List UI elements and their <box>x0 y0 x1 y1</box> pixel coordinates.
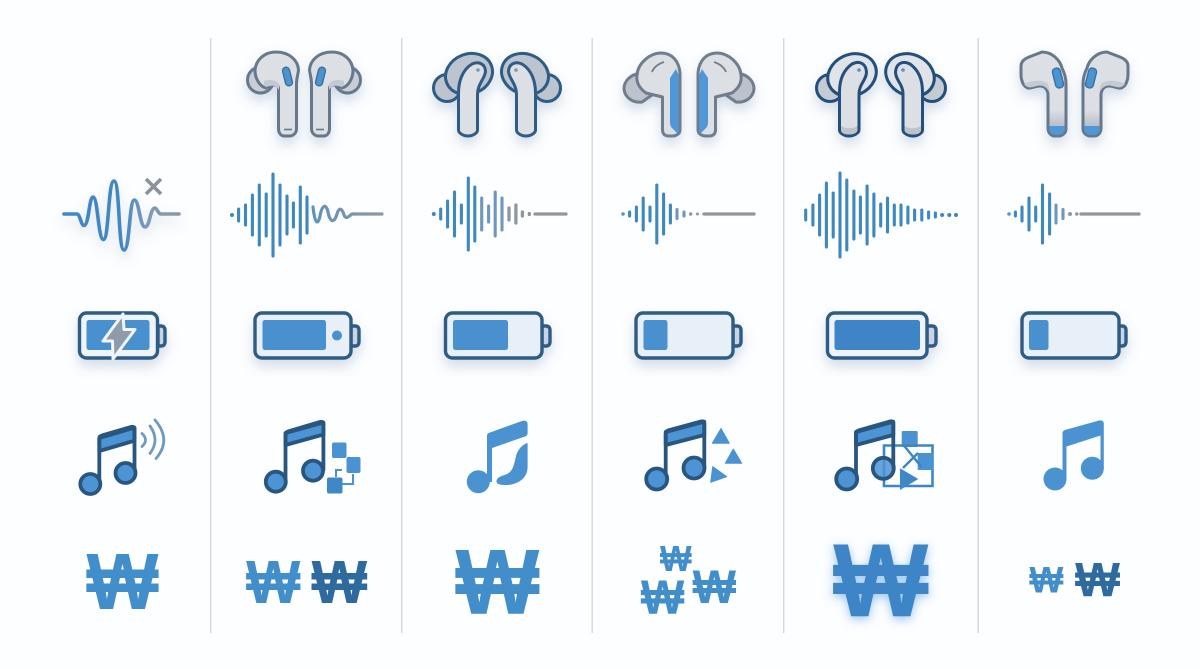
icon: waveform 5 <box>1007 185 1139 243</box>
icon: waveform 3 <box>621 185 754 243</box>
icon: battery charging <box>80 313 165 359</box>
icon: large won sign: ₩ <box>455 531 539 634</box>
icon: earbuds model 2 <box>434 46 560 136</box>
icon: battery with dot <box>255 313 359 358</box>
icon: largest won sign with glow: ₩ <box>833 522 929 638</box>
icon: three won signs <box>641 540 736 624</box>
icon: battery 20 percent <box>1022 313 1126 358</box>
icon: solid music note <box>1044 420 1104 490</box>
icon: battery 25 percent <box>636 313 741 358</box>
icon: two won signs: ₩ <box>311 548 367 616</box>
row: sound waves <box>64 173 1139 257</box>
icon: music note with wireless arcs <box>80 420 164 494</box>
icon: music note with mixed shapes <box>836 421 933 490</box>
icon: earbuds model 4 <box>816 46 946 136</box>
icon: earbuds model 1 <box>248 52 360 136</box>
icon: two won signs: ₩ <box>246 547 300 616</box>
icon: wave with cross <box>64 179 179 250</box>
icon: solid stylised music note <box>467 421 528 493</box>
row: music codecs <box>80 420 1104 494</box>
icon: three won signs: ₩ <box>641 570 685 624</box>
icon: earbuds model 3 <box>624 53 754 136</box>
icon: two won signs <box>246 547 367 616</box>
icon: two small won signs: ₩ <box>1029 559 1064 601</box>
icon: battery 60 percent <box>446 313 550 358</box>
icon: won sign single: ₩ <box>86 536 159 626</box>
icon: two small won signs <box>1029 554 1121 608</box>
icon: music note with triangles <box>646 421 742 490</box>
icon: music note with squares <box>266 422 360 494</box>
row: earbuds <box>248 46 1128 136</box>
icon: waveform 1 <box>230 174 382 256</box>
row: price won signs <box>86 522 1121 638</box>
icon: earbuds model 5 <box>1021 52 1128 136</box>
row: batteries <box>80 313 1126 359</box>
icon: waveform 2 <box>432 178 566 250</box>
icon: battery full <box>828 313 936 358</box>
icon: three won signs: ₩ <box>660 540 692 579</box>
icon: two small won signs: ₩ <box>1075 554 1121 608</box>
icon: waveform 4 <box>806 173 958 257</box>
icon: three won signs: ₩ <box>693 561 736 613</box>
